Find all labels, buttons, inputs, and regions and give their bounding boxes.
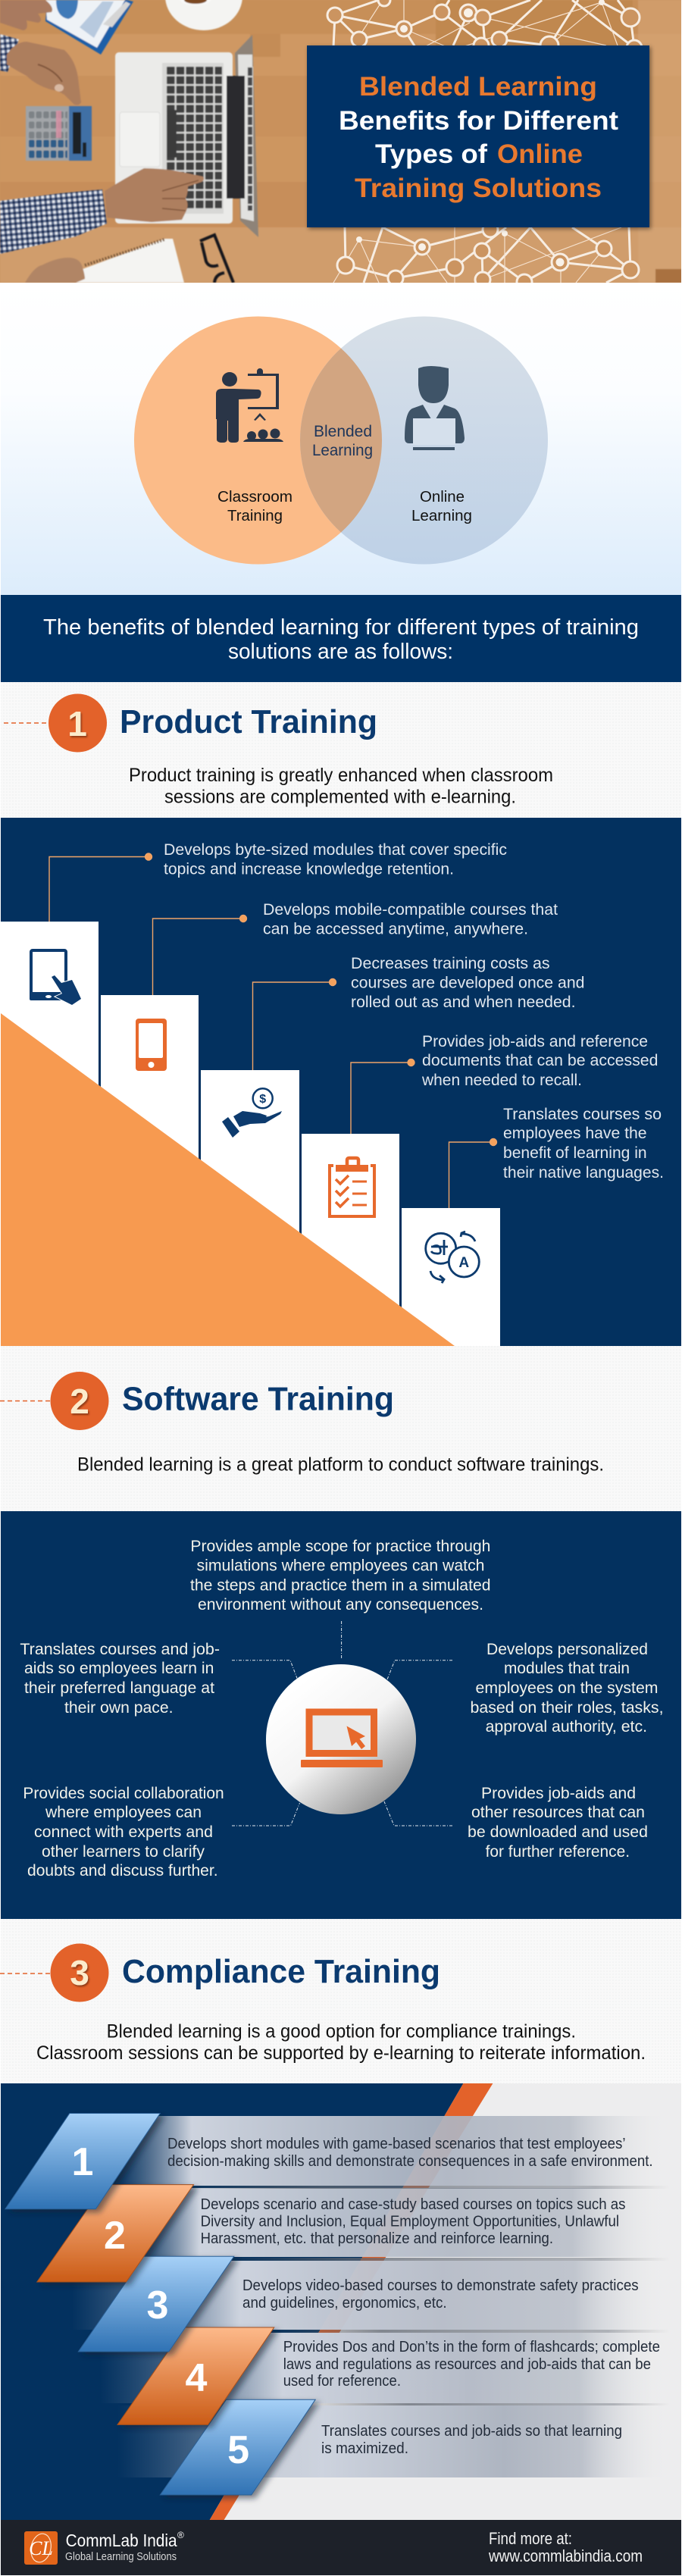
benefit: personalized modules: approval authority, etc. bbox=[486, 1718, 647, 1736]
calculator bbox=[25, 105, 70, 161]
intro band: solutions are as follows: bbox=[228, 640, 453, 664]
title box bbox=[307, 45, 649, 227]
website: www.commlabindia.com bbox=[488, 2546, 643, 2565]
label: blended learning: Learning bbox=[312, 442, 373, 459]
section background: product training bbox=[1, 682, 681, 818]
label: classroom training: Training bbox=[227, 507, 283, 524]
benefit: social collaboration: doubts and discuss further. bbox=[27, 1862, 218, 1880]
benefit text 2: Develops mobile-compatible courses that bbox=[263, 900, 558, 919]
label: online learning: Learning bbox=[411, 507, 472, 524]
panel: software training hub bbox=[1, 1511, 681, 1919]
benefit: job-aids bbox=[468, 1785, 648, 1861]
heading: product training bbox=[4, 694, 377, 752]
step text 3: and guidelines, ergonomics, etc. bbox=[242, 2294, 447, 2312]
benefit: social collaboration: where employees can bbox=[45, 1804, 202, 1821]
step 4 bbox=[117, 2327, 274, 2424]
benefit: practice simulations: environment without any consequences. bbox=[198, 1596, 483, 1614]
benefit text 2 bbox=[263, 900, 558, 938]
benefit text 5: employees have the bbox=[503, 1124, 647, 1142]
website: Find more at: bbox=[489, 2529, 572, 2548]
benefit text 1 bbox=[164, 840, 507, 878]
title box: Training Solutions bbox=[355, 174, 602, 203]
panel: compliance training list bbox=[1, 2083, 681, 2520]
benefit text 2: can be accessed anytime, anywhere. bbox=[263, 920, 528, 938]
benefit: personalized modules: employees on the system bbox=[476, 1679, 658, 1697]
clipboard bbox=[45, 0, 133, 55]
intro text: compliance training bbox=[36, 2020, 646, 2064]
benefit text 5: their native languages. bbox=[503, 1163, 664, 1182]
glasses bbox=[200, 235, 233, 283]
label: blended learning bbox=[312, 423, 373, 459]
benefit: personalized modules: modules that train bbox=[504, 1660, 630, 1677]
icon: translation bbox=[426, 1232, 479, 1283]
benefit text 4: when needed to recall. bbox=[421, 1071, 582, 1089]
dashed connectors bbox=[232, 1621, 452, 1826]
benefit: practice simulations: simulations where employees can watch bbox=[197, 1557, 485, 1574]
connector 5 bbox=[449, 1138, 497, 1208]
step 1: 1 bbox=[72, 2140, 93, 2184]
laptop bbox=[235, 35, 258, 237]
icon: tablet with finger bbox=[30, 950, 81, 1005]
bars bbox=[72, 2116, 670, 2477]
benefit: social collaboration: other learners to clarify bbox=[42, 1843, 205, 1861]
step text 3 bbox=[242, 2277, 639, 2312]
intro text: product training: sessions are complemented with e-learning. bbox=[164, 787, 516, 808]
step text 1: Develops short modules with game-based scenarios that test employees’ bbox=[167, 2135, 626, 2152]
step 4: 4 bbox=[186, 2356, 208, 2400]
step 3: 3 bbox=[147, 2283, 168, 2327]
heading: software training bbox=[0, 1372, 394, 1430]
intro text: product training bbox=[129, 765, 553, 808]
benefit: translations bbox=[20, 1641, 220, 1717]
number badge 3: 3 bbox=[70, 1953, 89, 1992]
step text 2: Diversity and Inclusion, Equal Employment Opportunities, Unlawful bbox=[201, 2213, 619, 2230]
step text 5: is maximized. bbox=[321, 2440, 408, 2457]
heading: software training: Software Training bbox=[122, 1381, 394, 1418]
step 1 bbox=[5, 2113, 160, 2209]
benefit: social collaboration: Provides social collaboration bbox=[23, 1785, 224, 1802]
hands and sleeves bbox=[0, 0, 52, 30]
number badge 2 bbox=[50, 1372, 109, 1430]
label: classroom training bbox=[217, 488, 293, 524]
benefit text 3: courses are developed once and bbox=[351, 974, 585, 992]
benefit: job-aids: for further reference. bbox=[486, 1843, 630, 1861]
benefit: personalized modules: based on their roles, tasks, bbox=[470, 1699, 664, 1717]
connector 1 bbox=[49, 853, 152, 922]
hero photo: laptop on wooden desk bbox=[0, 0, 682, 290]
number badge 2: 2 bbox=[70, 1382, 89, 1421]
orange triangle bbox=[1, 1013, 455, 1346]
step text 4 bbox=[283, 2338, 660, 2390]
step cards bbox=[1, 922, 500, 1346]
section background: software training bbox=[1, 1346, 681, 1511]
benefit: translations: their own pace. bbox=[64, 1699, 173, 1717]
coffee saucer bbox=[165, 0, 242, 30]
title box: Types of bbox=[375, 139, 487, 169]
benefit: job-aids: other resources that can bbox=[471, 1804, 645, 1821]
benefit text 4: documents that can be accessed bbox=[422, 1051, 658, 1069]
benefit: personalized modules: Develops personalized bbox=[486, 1641, 648, 1658]
benefit text 3 bbox=[351, 954, 585, 1011]
benefit text 5: Translates courses so bbox=[503, 1105, 662, 1123]
label: online learning bbox=[411, 488, 472, 524]
step text 2 bbox=[201, 2196, 626, 2247]
benefit: translations: their preferred language at bbox=[24, 1679, 214, 1697]
benefit: job-aids: Provides job-aids and bbox=[481, 1785, 636, 1802]
label: blended learning: Blended bbox=[314, 423, 372, 440]
benefit text 1: topics and increase knowledge retention. bbox=[164, 859, 454, 878]
step text 4: laws and regulations as resources and job-aids that can be bbox=[283, 2355, 651, 2373]
venn diagram panel bbox=[1, 317, 681, 595]
icon: hand with coin: $ bbox=[259, 1093, 266, 1106]
intro text: product training: Product training is greatly enhanced when classroom bbox=[129, 765, 553, 786]
step 5 bbox=[160, 2399, 315, 2495]
benefit: practice simulations: Provides ample scope for practice through bbox=[190, 1538, 490, 1555]
benefit text 5: benefit of learning in bbox=[503, 1144, 647, 1162]
company name: ® bbox=[177, 2530, 184, 2540]
step text 1 bbox=[167, 2135, 653, 2170]
benefit text 3: rolled out as and when needed. bbox=[351, 993, 576, 1011]
panel: product training stairs bbox=[1, 818, 681, 1346]
central sphere bbox=[266, 1664, 416, 1814]
heading: compliance training bbox=[0, 1943, 440, 2002]
website bbox=[488, 2529, 643, 2565]
benefit: translations: aids so employees learn in bbox=[24, 1660, 214, 1677]
step 2 bbox=[37, 2185, 193, 2282]
benefit text 4 bbox=[421, 1032, 658, 1089]
company name: CommLab India bbox=[66, 2531, 177, 2550]
label: online learning: Online bbox=[420, 488, 465, 505]
icon: classroom trainer bbox=[216, 368, 283, 443]
icon: smartphone bbox=[136, 1019, 167, 1071]
title box: Blended Learning bbox=[359, 72, 597, 102]
benefit text 5 bbox=[503, 1105, 664, 1182]
overlap: blended learning bbox=[300, 349, 382, 532]
benefit text 4: Provides job-aids and reference bbox=[422, 1032, 648, 1050]
icon: online learner bbox=[405, 366, 465, 450]
icon: checklist clipboard bbox=[330, 1158, 374, 1216]
icon: laptop with cursor bbox=[301, 1712, 383, 1767]
step 2: 2 bbox=[104, 2214, 126, 2258]
intro band bbox=[1, 595, 681, 682]
step 3 bbox=[78, 2256, 234, 2352]
logo bbox=[24, 2531, 58, 2565]
icon: translation: A bbox=[458, 1255, 469, 1271]
number badge 3 bbox=[50, 1943, 109, 2002]
benefit text 1: Develops byte-sized modules that cover specific bbox=[164, 840, 507, 859]
step text 2: Develops scenario and case-study based courses on topics such as bbox=[201, 2196, 626, 2213]
benefit: translations: Translates courses and job- bbox=[20, 1641, 220, 1658]
step 5: 5 bbox=[227, 2428, 249, 2472]
benefit: practice simulations bbox=[190, 1538, 491, 1614]
label: classroom training: Classroom bbox=[217, 488, 293, 505]
step text 4: used for reference. bbox=[283, 2372, 401, 2390]
step text 3: Develops video-based courses to demonstrate safety practices bbox=[242, 2277, 639, 2294]
benefit: social collaboration: connect with experts and bbox=[34, 1823, 213, 1841]
intro text: compliance training: Blended learning is a good option for compliance trainings. bbox=[107, 2020, 576, 2042]
network graphic bbox=[333, 0, 634, 283]
connector 3 bbox=[253, 979, 336, 1070]
footer bbox=[1, 2520, 681, 2575]
heading: product training: Product Training bbox=[120, 703, 377, 740]
icon: hand with coin bbox=[222, 1088, 282, 1138]
section background: compliance training bbox=[1, 1919, 681, 2083]
company name bbox=[65, 2530, 184, 2563]
number badge 1 bbox=[48, 694, 107, 752]
benefit: practice simulations: the steps and practice them in a simulated bbox=[190, 1577, 491, 1595]
connector 4 bbox=[351, 1060, 415, 1134]
title box: Benefits for Different bbox=[339, 106, 618, 136]
benefit text 3: Decreases training costs as bbox=[351, 954, 550, 972]
circle: online learning bbox=[300, 317, 548, 564]
benefit: social collaboration bbox=[23, 1785, 224, 1880]
notebook bbox=[72, 239, 184, 283]
intro band: The benefits of blended learning for different types of training bbox=[43, 615, 639, 640]
connector 2 bbox=[153, 916, 247, 995]
intro text: compliance training: Classroom sessions can be supported by e-learning to reiterate information. bbox=[36, 2042, 646, 2064]
circle: classroom training bbox=[134, 317, 382, 564]
heading: compliance training: Compliance Training bbox=[122, 1953, 440, 1990]
step text 5: Translates courses and job-aids so that learning bbox=[321, 2422, 622, 2440]
company name: Global Learning Solutions bbox=[65, 2551, 177, 2563]
benefit: personalized modules bbox=[470, 1641, 664, 1736]
intro text: software training: Blended learning is a great platform to conduct software trainings. bbox=[77, 1454, 604, 1476]
title box: Online bbox=[497, 139, 583, 169]
number badge 1: 1 bbox=[67, 704, 87, 743]
benefit: job-aids: be downloaded and used bbox=[468, 1823, 648, 1841]
logo: CL bbox=[29, 2537, 53, 2559]
step text 5 bbox=[321, 2422, 622, 2457]
step text 2: Harassment, etc. that personalize and reinforce learning. bbox=[201, 2230, 553, 2247]
